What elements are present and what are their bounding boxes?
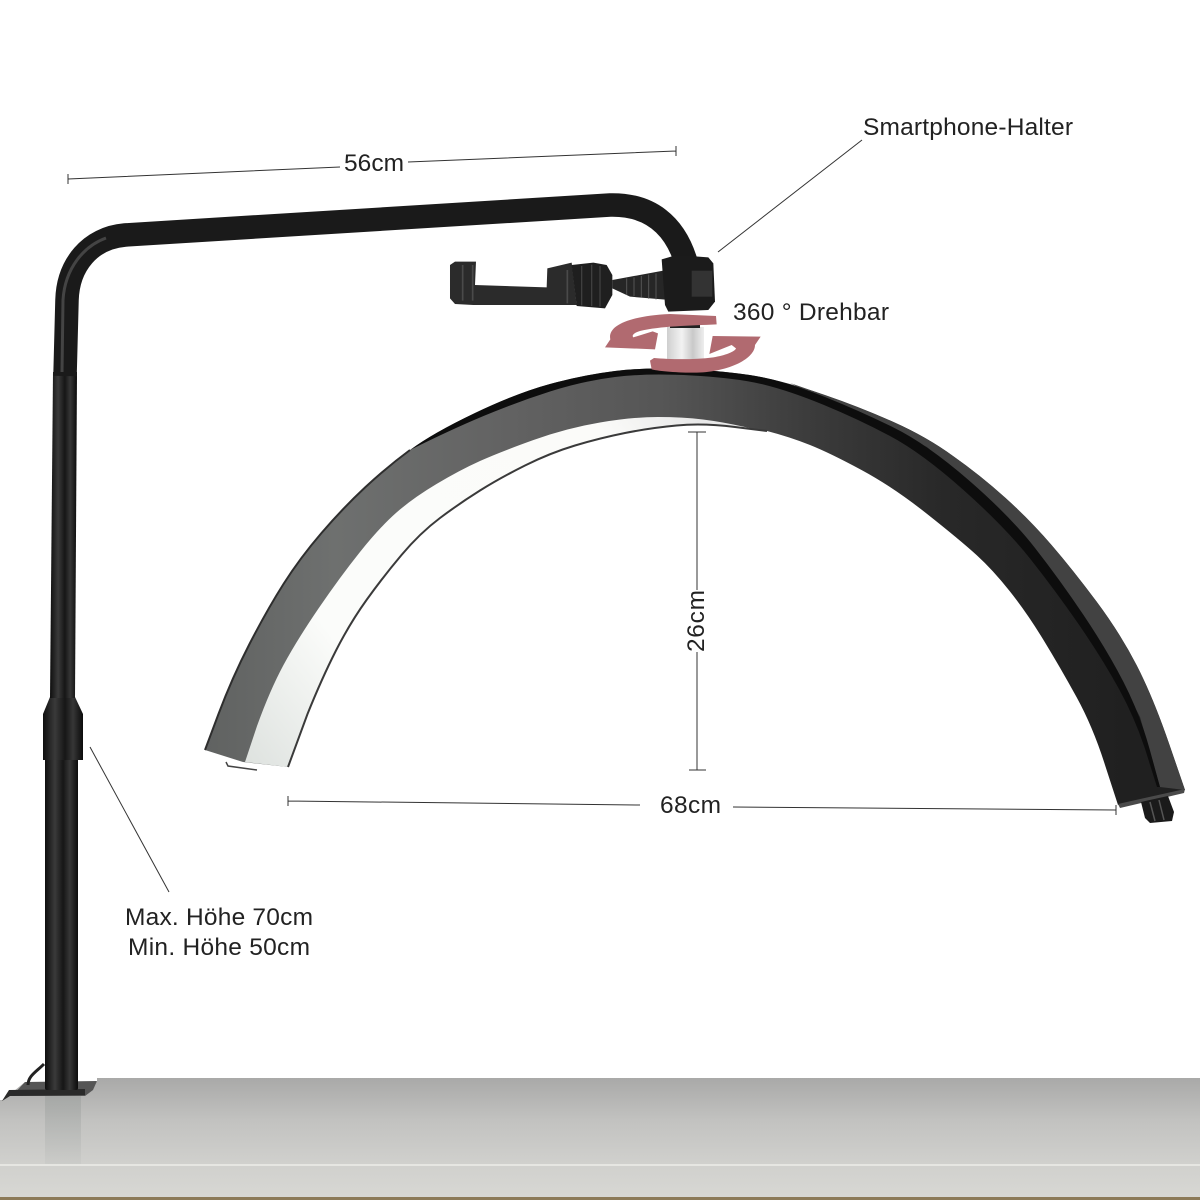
left tip wire (226, 762, 257, 770)
side clip (692, 271, 712, 297)
label: 360 degree: 360 ° Drehbar (733, 299, 889, 326)
clamp highlights (463, 265, 567, 303)
upper arrow (605, 314, 717, 349)
label 56cm: 56cm (344, 150, 404, 177)
label: height range: Max. Höhe 70cm (125, 904, 313, 931)
lower arrow (650, 336, 761, 373)
lamp arch (205, 369, 1185, 823)
rotation arrows (605, 314, 761, 373)
lamp stand (2, 205, 686, 1101)
height collar (43, 697, 83, 760)
knob (572, 263, 612, 308)
holder bar and clamps (450, 262, 577, 305)
dimmer knob (1141, 796, 1174, 823)
label 26cm: 26cm (683, 590, 710, 652)
clamp base (2, 1081, 97, 1101)
width dimension 56cm (68, 146, 676, 184)
panel rim (288, 425, 767, 767)
phone holder (450, 255, 715, 312)
arch face (205, 369, 1185, 805)
top edge and ridge (410, 369, 1160, 787)
label 68cm: 68cm (660, 792, 721, 819)
label: smartphone holder (718, 114, 1073, 252)
height dimension 26cm (683, 432, 710, 770)
right side strip (790, 383, 1185, 790)
spring neck (612, 271, 670, 300)
table top (0, 1078, 1200, 1200)
label: height range (90, 747, 313, 961)
label: smartphone holder: Smartphone-Halter (863, 114, 1073, 141)
curved arm (65, 205, 686, 376)
knob ridges (582, 265, 600, 307)
outer left edge line (205, 450, 410, 750)
arm sheen (62, 238, 106, 372)
upper pole (50, 372, 77, 698)
width dimension 68cm (288, 792, 1116, 819)
power cable (28, 1064, 44, 1085)
swivel column (667, 324, 704, 363)
LED panel (245, 417, 767, 767)
lower pole (45, 745, 78, 1090)
swivel joint (662, 255, 715, 312)
right bottom edge (1118, 789, 1185, 808)
label: height range: Min. Höhe 50cm (128, 934, 310, 961)
